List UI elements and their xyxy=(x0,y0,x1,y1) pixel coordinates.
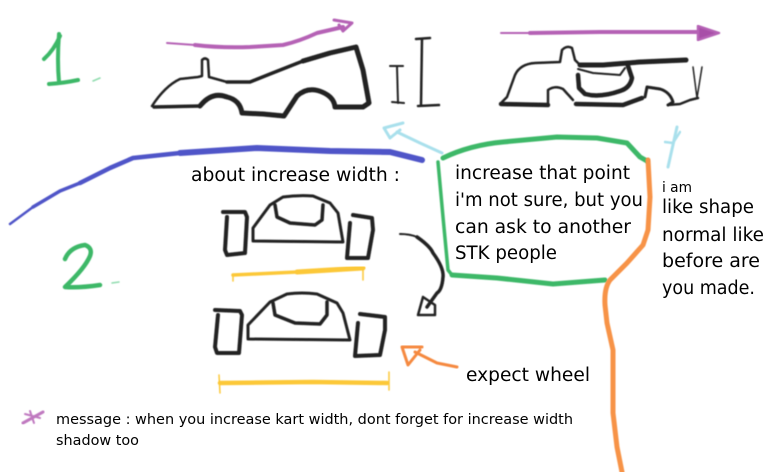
bubble text: can ask to another xyxy=(455,217,631,238)
blue curved stroke xyxy=(10,148,422,224)
bubble text: STK people xyxy=(455,243,557,264)
label: expect wheel: expect wheel xyxy=(466,365,590,386)
arrow: orange xyxy=(402,347,457,367)
callout arrow: light blue left xyxy=(384,123,442,153)
arrow: black curved xyxy=(400,234,443,315)
bubble text: increase that point xyxy=(455,163,630,184)
arrow: purple straight top right xyxy=(501,26,719,40)
kart side view: short xyxy=(501,47,702,105)
step number 2 xyxy=(65,245,119,287)
height marker tall xyxy=(416,38,439,106)
height marker short xyxy=(390,66,404,103)
kart front view: wide xyxy=(215,293,385,356)
message text: message : when you increase kart width, dont forget for increase width xyxy=(56,412,573,428)
arrow: purple curved top left xyxy=(167,20,352,47)
message text: shadow too xyxy=(56,433,139,449)
kart front view: narrow xyxy=(223,196,373,258)
heading: about increase width: about increase width : xyxy=(191,165,400,186)
side note text: you made. xyxy=(662,278,755,299)
icon: purple star mark xyxy=(23,411,43,423)
side note text: before are xyxy=(662,251,760,272)
message text xyxy=(56,412,573,449)
bubble text xyxy=(455,163,643,264)
callout arrow: light blue right xyxy=(665,127,680,167)
orange line xyxy=(605,160,650,472)
side note text: normal like xyxy=(662,225,764,246)
side note text: i am xyxy=(662,180,692,196)
yellow width bar: narrow xyxy=(233,268,363,281)
yellow width bar: wide xyxy=(219,372,389,393)
step number 1 xyxy=(44,34,100,84)
side note text xyxy=(662,180,764,299)
bubble text: i'm not sure, but you xyxy=(455,190,643,211)
green speech bubble xyxy=(438,137,647,284)
side note text: like shape xyxy=(662,197,754,218)
kart side view: long xyxy=(152,47,369,116)
